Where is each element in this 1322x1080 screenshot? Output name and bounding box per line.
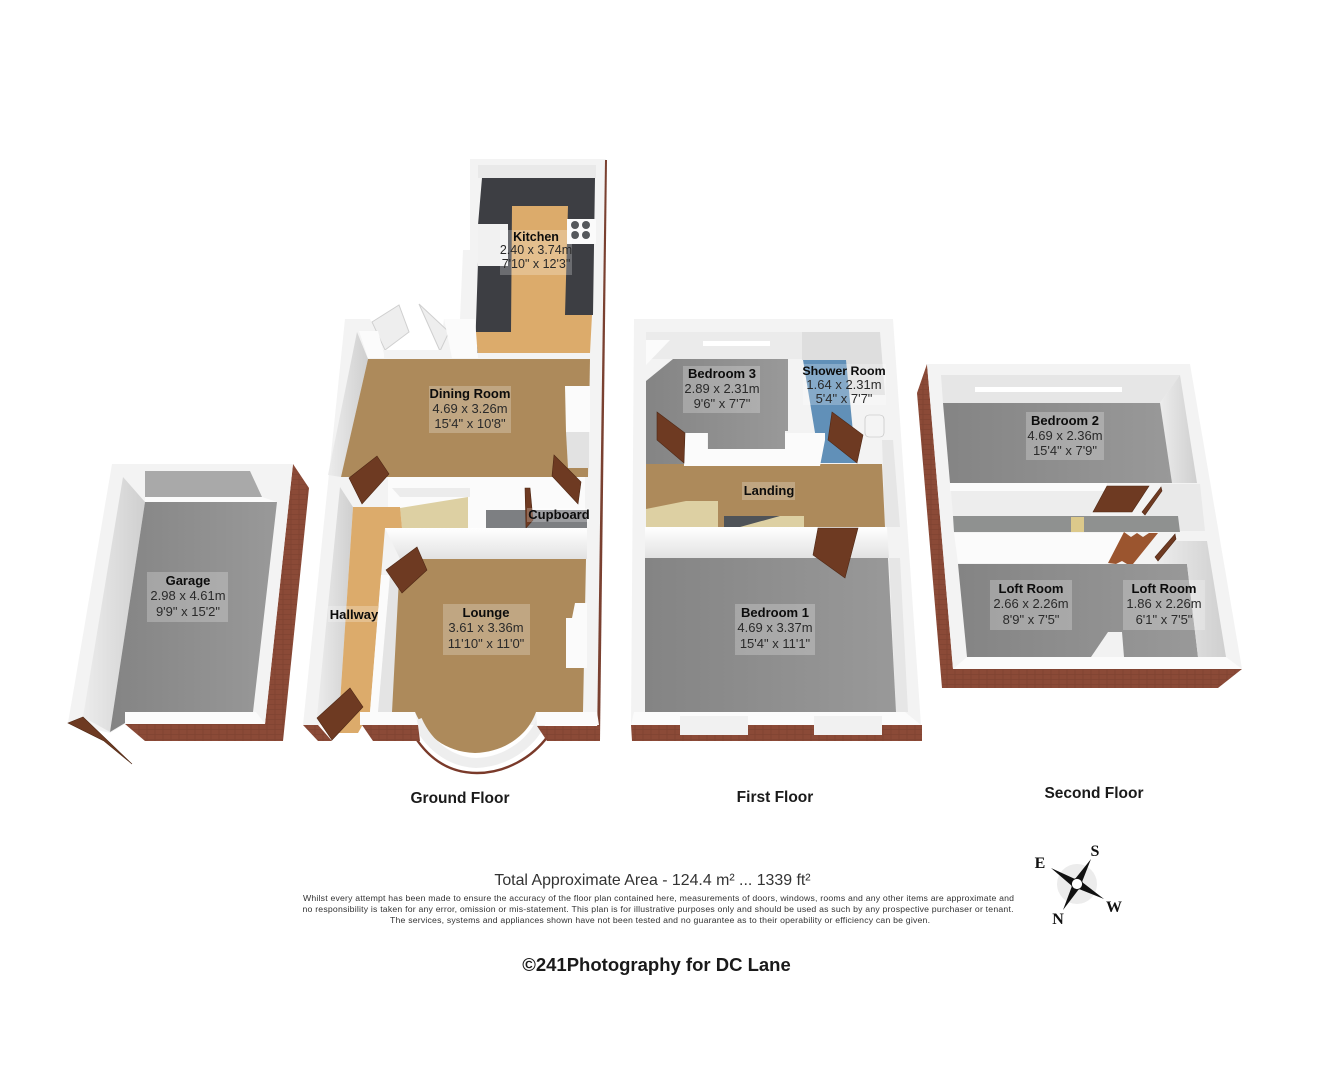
second floor brick faces [917,364,1242,688]
bedroom 3 label: 9'6" x 7'7" [694,396,751,411]
right exterior edge [597,160,607,741]
landing carpet [646,464,885,527]
garage label: Garage [166,573,210,588]
stairs [400,497,468,528]
bedroom 2 window [975,387,1122,392]
bedroom 1 right wall [889,558,908,712]
loft room right label: Loft Room [1132,581,1196,596]
cooker hob [567,219,596,244]
rear wall faces [646,332,880,359]
shower room door [828,412,863,463]
garage front wall end [125,712,265,724]
dining room label: 4.69 x 3.26m [432,401,508,416]
bedroom 3 door [657,412,685,463]
bedroom 1 label: 4.69 x 3.37m [737,620,813,635]
stairwell void [724,516,780,527]
bedroom 2 label: 15'4" x 7'9" [1033,443,1097,458]
panel: ground floor plan [303,159,607,773]
side door two [1155,534,1176,561]
lounge label: 11'10" x 11'0" [448,636,525,651]
lounge label [443,604,530,655]
cupboard door [525,488,533,528]
loft room right label: 6'1" x 7'5" [1136,612,1193,627]
bedroom 2 door [1093,486,1149,512]
garage white wall tops [68,464,293,733]
bedroom 3 window sill [703,341,770,346]
first floor walls silhouette [631,319,921,725]
bedroom 1 wall [645,527,889,558]
loft room floor [958,564,1198,657]
front window left [680,716,748,735]
bay window frame [417,720,541,763]
corridor stairs [1071,517,1084,532]
loft room left label: Loft Room [999,581,1063,596]
icon: compass: E [1035,855,1045,872]
panel: second floor plan [917,364,1242,688]
rear wall pillars [359,319,478,358]
dining room label: Dining Room [430,386,510,401]
under-stairs wall face [392,488,470,497]
shower room tiled floor [803,360,856,463]
bedroom 3 label: 2.89 x 2.31m [684,381,760,396]
garage label: 2.98 x 4.61m [150,588,226,603]
bedroom 2 right wall [1160,375,1197,483]
dining room carpet [341,359,590,477]
bedroom 2 floor [943,403,1172,483]
hallway front door [317,688,363,740]
loft room right label [1123,580,1205,630]
kitchen timber floor [475,206,592,353]
credit: ©241Photography for DC Lane [522,954,791,975]
landing label: Landing [744,483,794,498]
dining room counter [565,386,590,432]
hallway timber floor [338,507,402,733]
bedroom 2 label [1026,412,1104,460]
bedroom 1 door [813,528,858,578]
bedroom 1 label: Bedroom 1 [741,605,809,620]
landing side wall [882,440,900,527]
hallway label: Hallway [330,607,379,622]
second floor walls silhouette [927,364,1242,669]
cupboard floor [486,510,587,528]
chimney breast [566,603,587,668]
disclaimer: Whilst every attempt has been made to ensure the accuracy of the floor plan contained here, measurements of doors, windows, rooms and any other items are approximate and [303,893,1014,903]
garage label [147,572,228,622]
loft stairs [1108,532,1158,564]
disclaimer [302,893,1014,925]
panel: garage floor plan [68,464,309,764]
bedroom 2 back wall [941,375,1180,403]
stair wall [388,477,585,528]
bedroom 2 label: Bedroom 2 [1031,413,1099,428]
loft room left label: 8'9" x 7'5" [1003,612,1060,627]
hall partition top [370,575,390,712]
dining room left door [349,456,389,504]
total area: Total Approximate Area - 124.4 m² ... 1339 ft² [494,872,811,889]
wash basin [865,415,884,437]
shower room label: 5'4" x 7'7" [816,391,873,406]
icon: compass: N [1052,911,1064,928]
garage side wall [83,477,145,732]
front window right [814,716,882,735]
loft divider [1091,632,1124,657]
garage back wall end [145,497,277,502]
front wall tops [360,712,599,725]
wall between hall and lounge [385,528,587,559]
garage label: 9'9" x 15'2" [156,604,220,619]
ground floor walls silhouette [303,159,606,725]
shower room label: Shower Room [802,364,886,378]
loft right wall [1156,541,1226,657]
icon: compass [1035,843,1122,928]
dining room label [429,386,511,433]
shower room label: 1.64 x 2.31m [806,377,882,392]
disclaimer: no responsibility is taken for any error, omission or mis-statement. This plan is for illustrative purposes only and should be used as such by any prospective purchaser or tenant. [302,904,1014,914]
loft room left label [990,580,1072,630]
icon: compass: W [1106,899,1122,916]
ground floor side wall shading upper [328,332,368,477]
lounge label: Lounge [463,605,509,620]
kitchen label: 2.40 x 3.74m [500,243,572,257]
first floor brick base [631,725,922,741]
bedroom 1 label [735,604,815,655]
dining room counter shade [566,432,589,468]
ground floor side wall shading lower [317,487,353,733]
bedroom 3 label: Bedroom 3 [688,366,756,381]
kitchen granite worktop floor [475,178,595,353]
heading: ground floor: Ground Floor [410,790,510,807]
corridor floor [953,516,1180,532]
landing stairs lower flight [646,501,718,527]
kitchen back wall [478,165,596,178]
kitchen label [500,230,572,275]
landing stairs upper flight [736,516,804,527]
dining room label: 15'4" x 10'8" [434,416,506,431]
lounge carpet [392,559,586,753]
corridor right wall [1142,484,1205,531]
kitchen sink [478,224,508,266]
loft front wall top [953,657,1242,669]
heading: first floor: First Floor [737,789,813,806]
wall between bedroom 3 and landing [684,433,825,466]
bay window brick edge [415,736,548,773]
front brick faces [303,725,600,741]
garage concrete floor [110,502,277,732]
loft back wall [954,533,1124,572]
loft room left label: 2.66 x 2.26m [993,596,1069,611]
heading: second floor: Second Floor [1044,785,1144,802]
corridor wall [950,483,1107,491]
bedroom 3 label [683,366,760,413]
shower room label [802,364,886,406]
front wall top [631,712,921,725]
french doors [372,304,449,351]
garage back wall opening [145,471,262,497]
kitchen label: 7'10" x 12'3" [502,257,570,271]
shower room back wall [802,332,885,395]
lounge label: 3.61 x 3.36m [448,620,524,635]
corridor wall face [951,491,1105,516]
icon: compass: S [1091,843,1100,860]
bedroom 1 floor [645,558,896,712]
cupboard label: Cupboard [528,507,590,522]
loft room right label: 1.86 x 2.26m [1126,596,1202,611]
hall partition side [378,575,400,712]
bedroom 3 corner wall [646,340,670,365]
kitchen label: Kitchen [513,230,559,244]
disclaimer: The services, systems and appliances shown have not been tested and no guarantee as to their operability or efficiency can be given. [390,915,930,925]
lounge door [386,547,427,593]
dining room right door [552,455,581,504]
bedroom 1 label: 15'4" x 11'1" [740,636,811,651]
side door one [1142,487,1162,515]
rear wall under doors [384,350,444,359]
bedroom 3 floor [646,359,788,465]
garage outer brick wall [125,464,309,741]
garage door [68,717,132,764]
panel: first floor plan [631,319,922,741]
bedroom 2 label: 4.69 x 2.36m [1027,428,1103,443]
